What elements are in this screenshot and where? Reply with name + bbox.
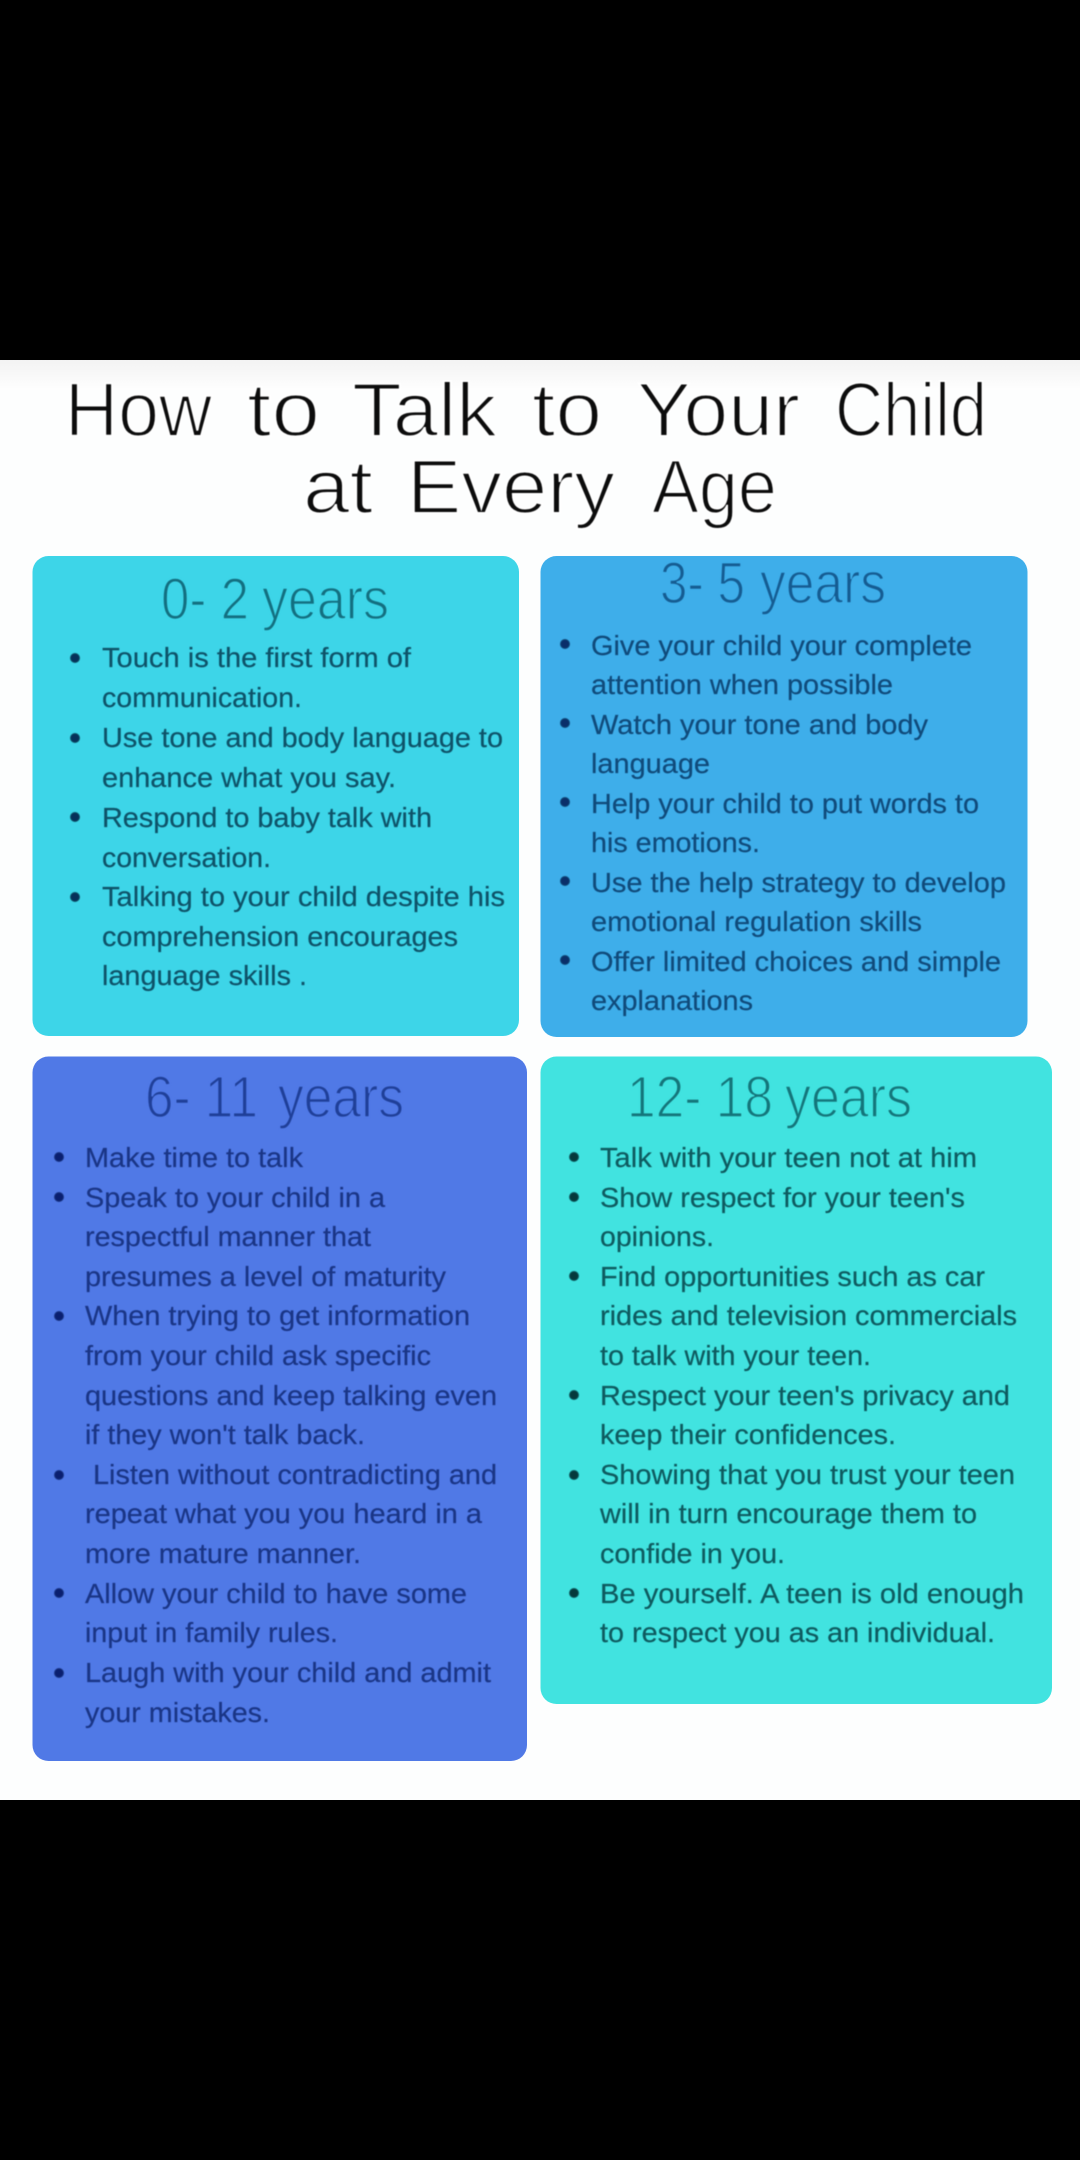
heading: 3-5 years xyxy=(660,551,886,616)
title: Every xyxy=(407,445,615,530)
heading: 12-18 years: years xyxy=(785,1065,912,1130)
bullet list: 6-11 years: repeat what you you heard in a xyxy=(85,1498,482,1529)
bullet list: 3-5 years: explanations xyxy=(591,985,753,1016)
bullet list: 12-18 years: confide in you. xyxy=(600,1538,785,1569)
bullet list: 0-2 years: Respond to baby talk with xyxy=(102,802,432,833)
bullet list: 12-18 years: opinions. xyxy=(600,1221,714,1252)
bullet list: 6-11 years xyxy=(54,1142,497,1728)
bullet list: 12-18 years: Respect your teen's privacy and xyxy=(600,1380,1010,1411)
bullet list: 0-2 years: Talking to your child despite his xyxy=(102,881,505,912)
heading: 6-11 years xyxy=(145,1065,404,1130)
bullet list: 12-18 years: Show respect for your teen's xyxy=(600,1182,965,1213)
bullet list: 0-2 years: conversation. xyxy=(102,842,271,873)
bullet list: 6-11 years: your mistakes. xyxy=(85,1697,270,1728)
heading: 3-5 years: 3- 5 xyxy=(660,551,745,616)
panel background: 3-5 years xyxy=(540,556,1028,1037)
bottom black band xyxy=(0,1800,1080,2160)
bullet list: 6-11 years: presumes a level of maturity xyxy=(85,1261,446,1292)
bullet list: 0-2 years: enhance what you say. xyxy=(102,762,396,793)
title xyxy=(65,368,987,530)
bullet list: 6-11 years: if they won't talk back. xyxy=(85,1419,365,1450)
title: at xyxy=(303,445,373,530)
bullet list: 0-2 years: language skills . xyxy=(102,960,307,991)
bullet list: 3-5 years: emotional regulation skills xyxy=(591,906,922,937)
bullet list: 6-11 years: more mature manner. xyxy=(85,1538,361,1569)
bullet list: 3-5 years: Offer limited choices and simple xyxy=(591,946,1001,977)
bullet list: 3-5 years: attention when possible xyxy=(591,669,893,700)
panel: 3-5 years xyxy=(540,551,1028,1037)
bullet list: 6-11 years: input in family rules. xyxy=(85,1617,338,1648)
bullet list: 6-11 years: Speak to your child in a xyxy=(85,1182,385,1213)
heading: 12-18 years: 12- 18 xyxy=(627,1065,773,1130)
bullet list: 0-2 years xyxy=(70,642,505,991)
bullet list: 12-18 years: rides and television commercials xyxy=(600,1300,1017,1331)
bullet list: 6-11 years: Make time to talk xyxy=(85,1142,304,1173)
bullet list: 0-2 years: Touch is the first form of xyxy=(102,642,411,673)
heading: 6-11 years: years xyxy=(278,1065,404,1130)
bullet list: 6-11 years: Allow your child to have some xyxy=(85,1578,467,1609)
title: How xyxy=(65,368,213,453)
heading: 0-2 years: years xyxy=(262,567,389,632)
bullet list: 12-18 years: Be yourself. A teen is old enough xyxy=(600,1578,1024,1609)
bullet list: 3-5 years: Give your child your complete xyxy=(591,630,972,661)
bullet list: 12-18 years: Talk with your teen not at him xyxy=(600,1142,977,1173)
bullet list: 12-18 years: to respect you as an individual. xyxy=(600,1617,995,1648)
heading: 6-11 years: 6- 11 xyxy=(145,1065,258,1130)
heading: 3-5 years: years xyxy=(760,551,886,616)
top black band xyxy=(0,0,1080,360)
title: to xyxy=(247,368,320,453)
title: Talk xyxy=(352,368,498,453)
panel: 12-18 years xyxy=(540,1056,1052,1704)
bullet list: 0-2 years: comprehension encourages xyxy=(102,921,458,952)
bullet list: 0-2 years: Use tone and body language to xyxy=(102,722,503,753)
bullet list: 3-5 years: Help your child to put words to xyxy=(591,788,979,819)
bullet list: 6-11 years: respectful manner that xyxy=(85,1221,371,1252)
bullet list: 12-18 years: Find opportunities such as car xyxy=(600,1261,985,1292)
title: Child xyxy=(835,368,987,453)
bullet list: 3-5 years: Watch your tone and body xyxy=(591,709,928,740)
white content area xyxy=(0,360,1080,1800)
bullet list: 0-2 years: communication. xyxy=(102,682,302,713)
bullet list: 6-11 years: from your child ask specific xyxy=(85,1340,431,1371)
title: to xyxy=(532,368,602,453)
bullet list: 12-18 years: to talk with your teen. xyxy=(600,1340,871,1371)
bullet list: 3-5 years: language xyxy=(591,748,710,779)
title: Your xyxy=(637,368,800,453)
panel: 0-2 years xyxy=(32,556,519,1036)
panel background: 6-11 years xyxy=(32,1056,527,1761)
bullet list: 12-18 years: will in turn encourage them to xyxy=(599,1498,977,1529)
heading: 0-2 years: 0- 2 xyxy=(161,567,249,632)
bullet list: 12-18 years xyxy=(570,1142,1024,1648)
bullet list: 12-18 years: Showing that you trust your teen xyxy=(600,1459,1015,1490)
bullet list: 3-5 years: Use the help strategy to develop xyxy=(591,867,1006,898)
bullet list: 12-18 years: keep their confidences. xyxy=(600,1419,896,1450)
bullet list: 6-11 years: Listen without contradicting and xyxy=(93,1459,497,1490)
panel background: 0-2 years xyxy=(32,556,519,1036)
bullet list: 3-5 years: his emotions. xyxy=(591,827,760,858)
panel: 6-11 years xyxy=(32,1056,527,1761)
bullet list: 6-11 years: questions and keep talking even xyxy=(85,1380,497,1411)
bullet list: 3-5 years xyxy=(560,630,1006,1016)
bullet list: 6-11 years: Laugh with your child and admit xyxy=(85,1657,491,1688)
panel background: 12-18 years xyxy=(540,1056,1052,1704)
title: Age xyxy=(652,445,777,530)
heading: 0-2 years xyxy=(161,567,389,632)
heading: 12-18 years xyxy=(627,1065,912,1130)
bullet list: 6-11 years: When trying to get information xyxy=(85,1300,470,1331)
